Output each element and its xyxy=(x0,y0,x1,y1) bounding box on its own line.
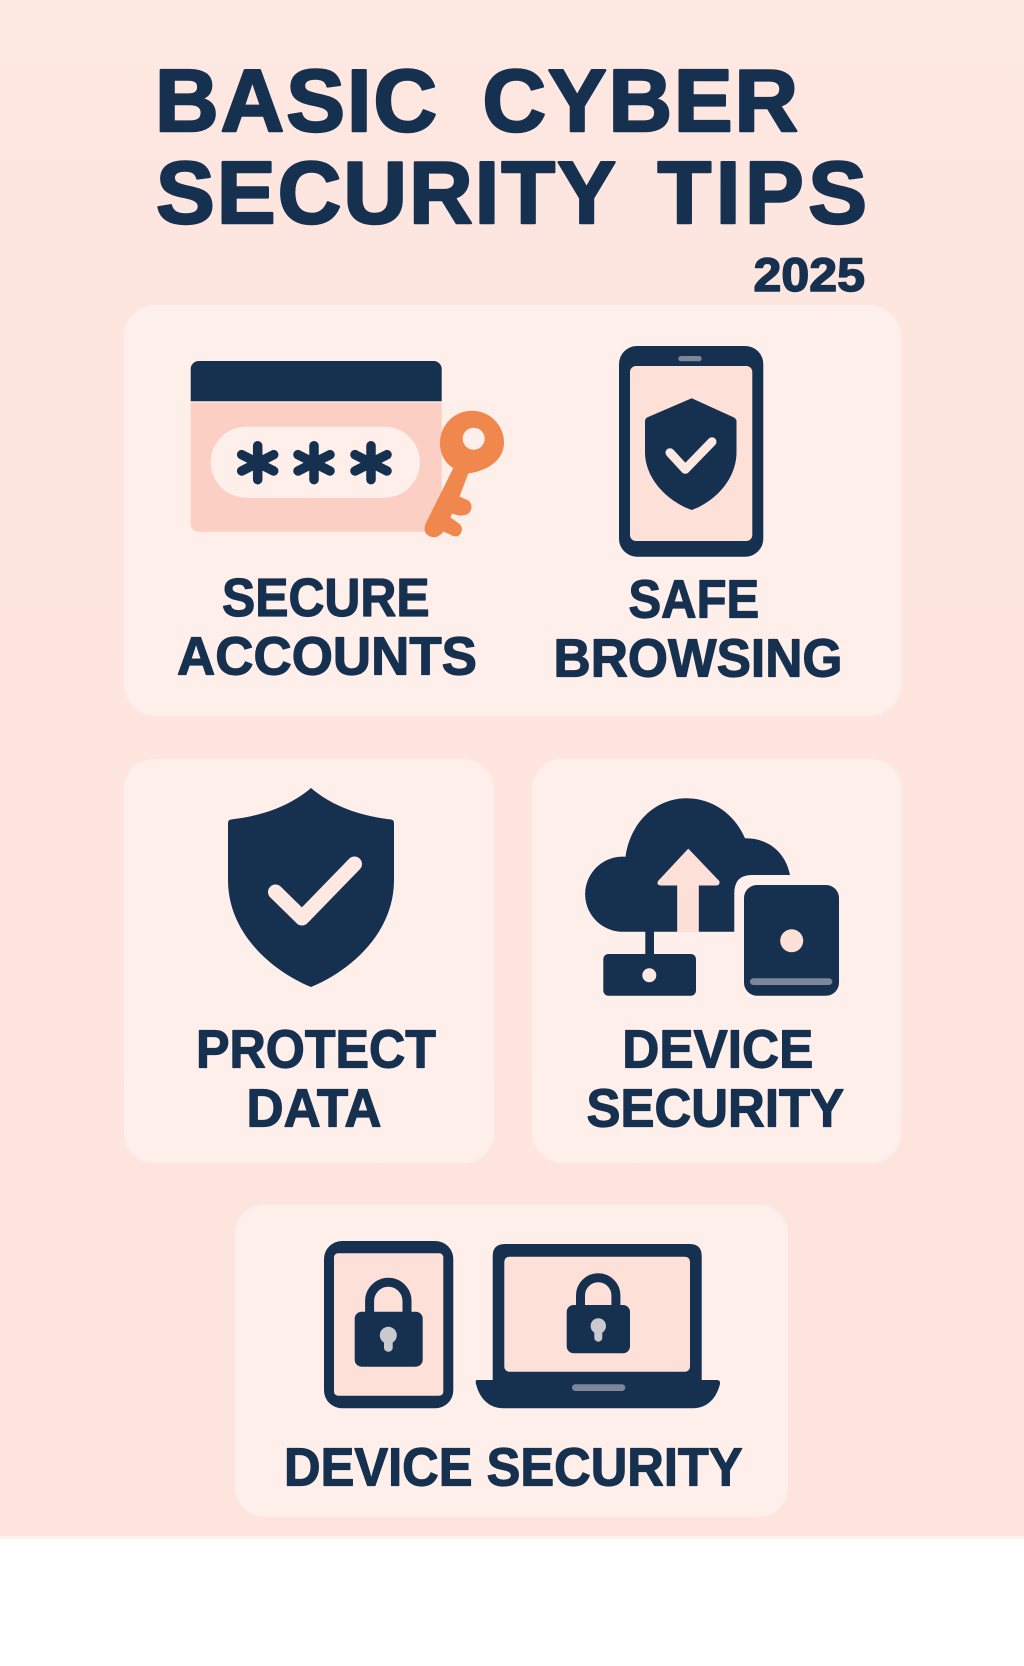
icon: orange key xyxy=(425,411,504,537)
panel: device security cloud xyxy=(532,759,901,1163)
label: device security xyxy=(586,1020,844,1139)
icon: laptop with lock xyxy=(476,1244,720,1408)
panel: protect data xyxy=(124,759,494,1163)
label: safe browsing xyxy=(554,570,842,689)
label: safe browsing: BROWSING xyxy=(554,629,842,689)
label: protect data: PROTECT xyxy=(196,1020,436,1080)
icon: tablet with lock xyxy=(324,1241,453,1408)
title: CYBER xyxy=(482,51,798,150)
year: 2025 xyxy=(754,248,865,301)
label: protect data: DATA xyxy=(246,1079,382,1139)
title: SECURITY xyxy=(156,143,616,242)
label: device security: DEVICE SECURITY xyxy=(284,1438,743,1498)
icon: cloud upload with devices xyxy=(585,798,839,996)
title: BASIC xyxy=(155,51,437,150)
label: device security: DEVICE xyxy=(622,1020,813,1080)
icon: password window xyxy=(191,361,442,532)
label: secure accounts xyxy=(177,568,477,686)
icon: shield with check xyxy=(228,788,394,987)
label: safe browsing: SAFE xyxy=(628,570,759,630)
panel: secure accounts and safe browsing xyxy=(124,305,901,716)
label: device security: SECURITY xyxy=(586,1079,844,1139)
label: protect data xyxy=(196,1020,436,1139)
label: secure accounts: ACCOUNTS xyxy=(177,626,477,686)
label: secure accounts: SECURE xyxy=(222,568,430,628)
title xyxy=(155,51,867,242)
panel: device security locks xyxy=(235,1204,788,1517)
title: TIPS xyxy=(658,143,867,242)
icon: phone with shield xyxy=(619,346,763,557)
